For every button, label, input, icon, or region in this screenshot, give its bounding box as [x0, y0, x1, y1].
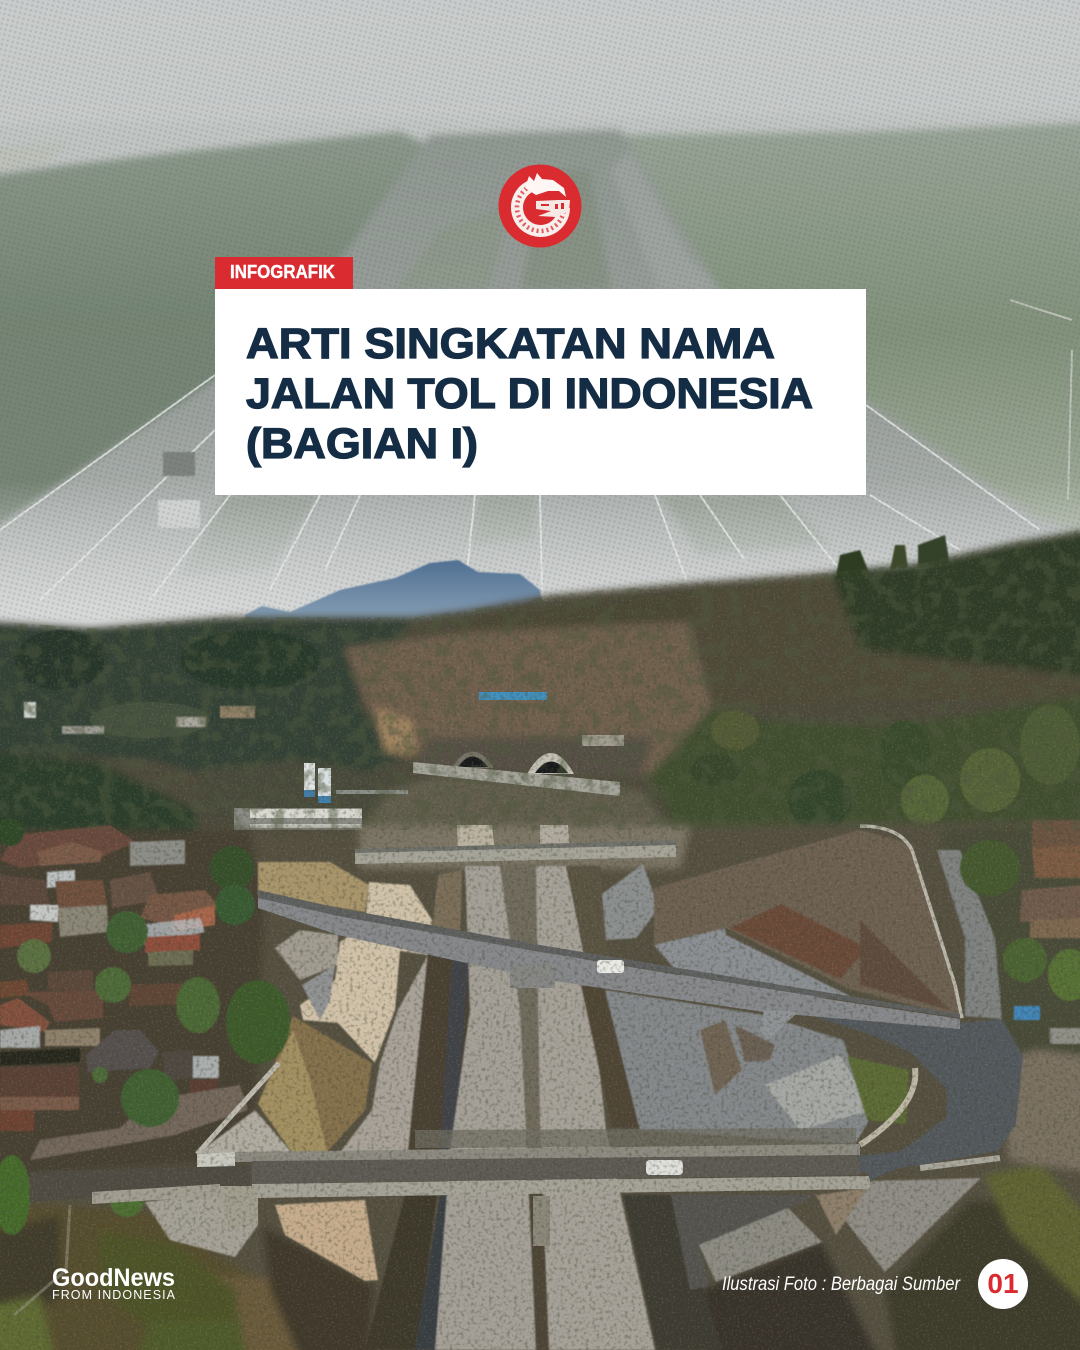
tunnel plaza structure — [413, 762, 620, 796]
logo: red circle with white Garuda ring — [498, 164, 582, 248]
mountain — [245, 560, 545, 625]
label: INFOGRAFIK — [215, 257, 353, 289]
brand: GoodNews from Indonesia: FROM INDONESIA — [52, 1288, 176, 1302]
upper overpass bridge — [355, 840, 676, 864]
right access road — [802, 850, 1023, 1175]
retaining wall curve — [860, 1068, 915, 1145]
road guard walls — [920, 1158, 1000, 1168]
hillside and forest — [0, 526, 1080, 860]
stair wall — [197, 1063, 279, 1154]
central highway lanes — [365, 825, 655, 1350]
highway lane lines — [0, 300, 1072, 600]
diagonal overpass bridge — [258, 890, 960, 1040]
distant vehicles — [158, 452, 200, 528]
green strips between lanes — [175, 495, 320, 580]
upper halftone sky and highway — [0, 0, 1080, 640]
forest tree patches — [15, 535, 1080, 830]
page number badge — [978, 1259, 1028, 1309]
left concrete drainage slope — [145, 870, 470, 1281]
right village — [960, 820, 1080, 1044]
lower base ground — [0, 820, 1080, 1350]
page number badge: 01 — [987, 1268, 1019, 1299]
tunnel portals — [452, 735, 624, 774]
triangular embankment — [654, 830, 964, 1019]
lower overpass bridge — [30, 1128, 920, 1246]
brand: GoodNews from Indonesia: GoodNews — [52, 1264, 175, 1292]
title panel: JALAN TOL DI INDONESIA — [246, 370, 813, 418]
left-edge retaining wall — [14, 1205, 70, 1315]
photo grain — [0, 520, 1080, 1350]
village with roofs and trees — [0, 818, 290, 1235]
grass slopes left of road — [258, 862, 372, 1154]
tunnel sign — [479, 692, 547, 700]
bottom-left vegetation — [0, 1230, 250, 1350]
title panel: ARTI SINGKATAN NAMA — [246, 320, 775, 368]
right concrete slope — [581, 864, 981, 1350]
title panel — [215, 289, 866, 495]
title panel: (BAGIAN I) — [246, 420, 478, 468]
silos — [304, 763, 408, 803]
embankment fence — [860, 826, 962, 1018]
label: INFOGRAFIK: INFOGRAFIK — [230, 262, 335, 282]
white building — [234, 808, 362, 830]
